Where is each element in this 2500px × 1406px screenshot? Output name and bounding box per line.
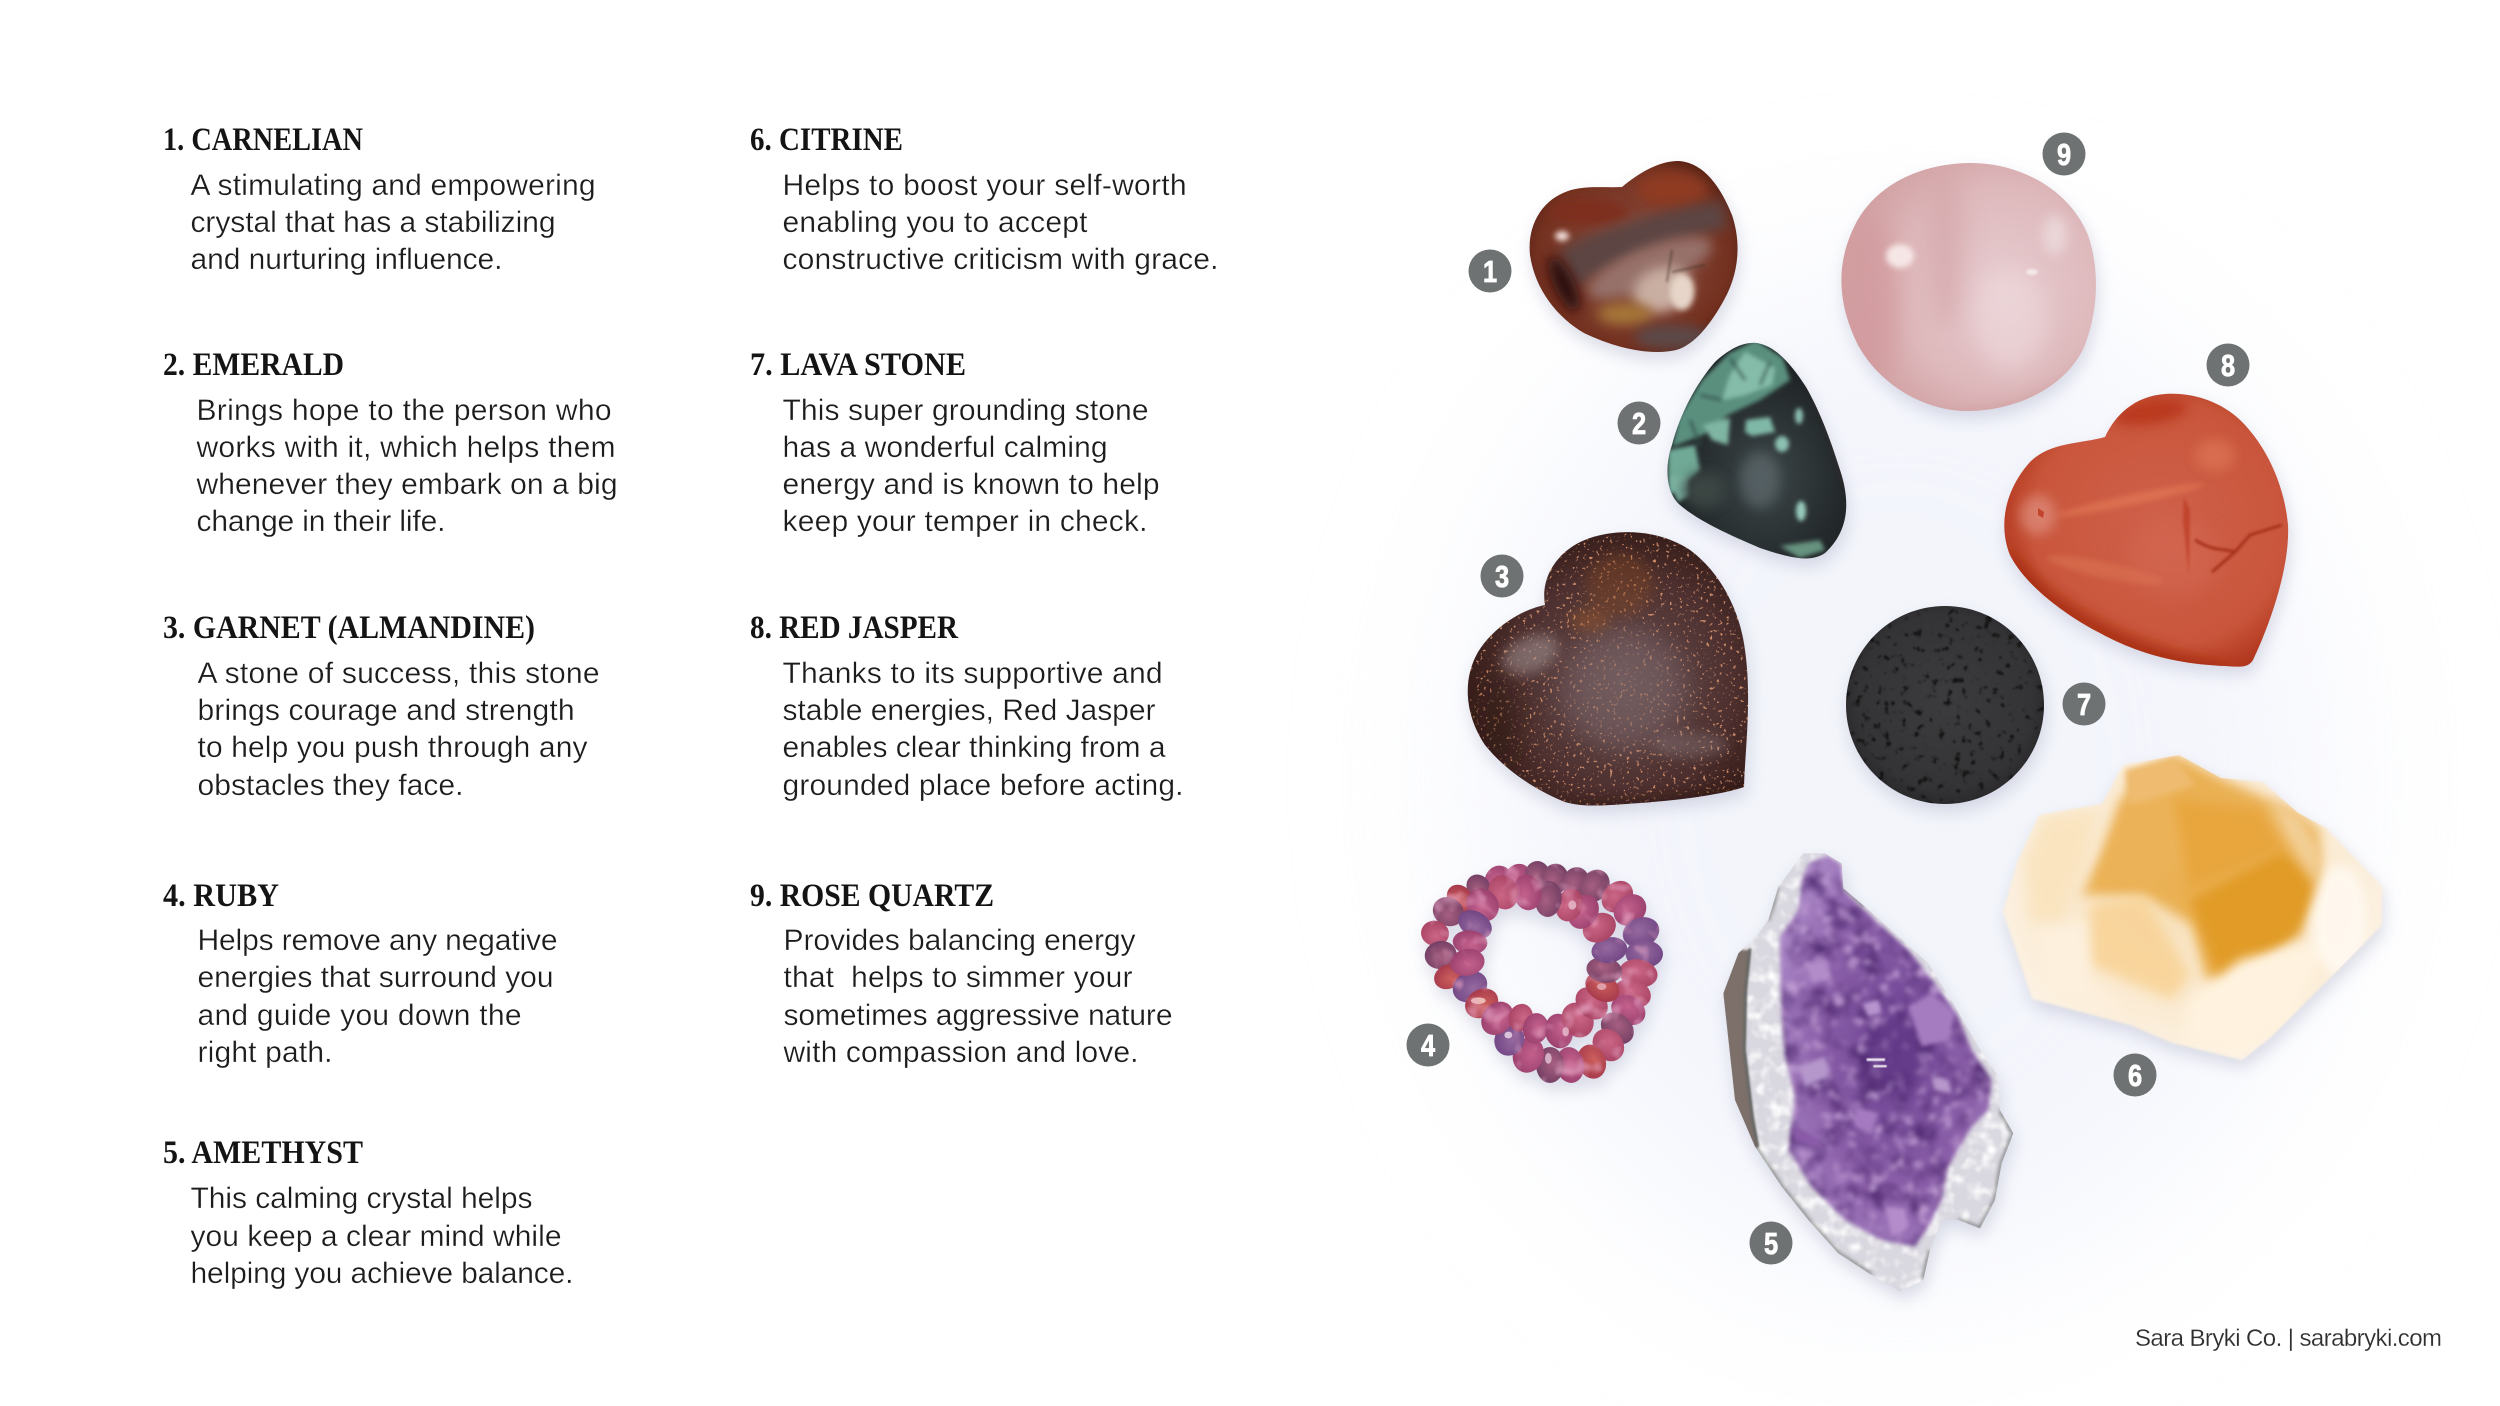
description: brings courage and strength xyxy=(198,694,574,727)
description: obstacles they face. xyxy=(198,769,464,802)
description: constructive criticism with grace. xyxy=(782,243,1218,276)
item 7: Lava Stone xyxy=(750,347,1160,538)
item 1: Carnelian xyxy=(163,122,596,276)
crystal: citrine cluster xyxy=(2003,755,2382,1060)
description: whenever they embark on a big xyxy=(196,468,618,501)
item 4: Ruby xyxy=(163,878,558,1069)
badge 1 xyxy=(1468,250,1512,292)
footer credit: Sara Bryki Co. | sarabryki.com xyxy=(2135,1325,2442,1352)
badge 6 xyxy=(2114,1054,2156,1096)
description: and nurturing influence. xyxy=(190,243,502,276)
description: Thanks to its supportive and xyxy=(782,657,1162,690)
description: energies that surround you xyxy=(198,961,554,994)
description: that helps to simmer your xyxy=(784,961,1132,994)
item 2: Emerald xyxy=(163,347,618,538)
badge 3: 3 xyxy=(1495,560,1509,595)
description: to help you push through any xyxy=(198,731,588,764)
description xyxy=(782,394,1160,538)
badge 5: 5 xyxy=(1764,1227,1778,1262)
description: grounded place before acting. xyxy=(782,769,1184,802)
description xyxy=(190,169,596,276)
heading: 8. RED JASPER xyxy=(750,610,959,646)
crystal: ruby bead bracelet xyxy=(1419,860,1664,1085)
crystal: red jasper heart xyxy=(2000,394,2288,680)
text column 1 xyxy=(163,122,618,1290)
description: A stimulating and empowering xyxy=(190,169,596,202)
description xyxy=(198,657,600,802)
description: Helps to boost your self-worth xyxy=(782,169,1186,202)
badge 1: 1 xyxy=(1483,255,1497,290)
description xyxy=(782,657,1184,802)
description: you keep a clear mind while xyxy=(190,1220,562,1253)
description xyxy=(196,394,618,538)
badge 8: 8 xyxy=(2221,349,2235,384)
heading: 9. ROSE QUARTZ xyxy=(750,878,994,914)
description: enables clear thinking from a xyxy=(782,731,1166,764)
description: crystal that has a stabilizing xyxy=(190,206,556,239)
soft blue studio shading behind crystals xyxy=(1480,280,2320,1280)
badge 9 xyxy=(2042,132,2086,176)
badge 4 xyxy=(1406,1024,1450,1066)
heading: 4. RUBY xyxy=(163,878,279,914)
description: Brings hope to the person who xyxy=(196,394,612,427)
description: right path. xyxy=(198,1036,332,1069)
heading: 2. EMERALD xyxy=(163,347,344,383)
badge 3 xyxy=(1480,554,1524,598)
description: This super grounding stone xyxy=(782,394,1148,427)
badge 8 xyxy=(2206,344,2250,386)
badge 2 xyxy=(1618,402,1660,444)
crystal: emerald tumbled stone xyxy=(1667,340,1860,558)
item 5: Amethyst xyxy=(163,1135,574,1290)
description: helping you achieve balance. xyxy=(190,1257,574,1290)
description: works with it, which helps them xyxy=(196,431,616,464)
badge 2: 2 xyxy=(1632,407,1646,442)
description xyxy=(190,1182,574,1290)
item 6: Citrine xyxy=(750,122,1218,276)
description: A stone of success, this stone xyxy=(198,657,600,690)
heading: 1. CARNELIAN xyxy=(163,122,363,158)
badge 6: 6 xyxy=(2128,1059,2142,1094)
description: keep your temper in check. xyxy=(782,505,1148,538)
crystal: garnet heart xyxy=(1468,532,1748,815)
badge 7 xyxy=(2062,682,2106,726)
crystal: carnelian heart xyxy=(1530,161,1738,352)
description: This calming crystal helps xyxy=(190,1182,532,1215)
badge 4: 4 xyxy=(1421,1029,1435,1064)
description: has a wonderful calming xyxy=(782,431,1108,464)
heading: 3. GARNET (ALMANDINE) xyxy=(163,610,535,646)
description: Helps remove any negative xyxy=(198,924,558,957)
heading: 6. CITRINE xyxy=(750,122,903,158)
description: Provides balancing energy xyxy=(784,924,1136,957)
item 3: Garnet xyxy=(163,610,600,802)
description: change in their life. xyxy=(196,505,446,538)
description: with compassion and love. xyxy=(782,1036,1138,1069)
description xyxy=(198,924,558,1069)
crystal: lava stone sphere xyxy=(1846,606,2044,804)
badge 5 xyxy=(1750,1222,1792,1264)
crystal: rose quartz xyxy=(1840,163,2110,430)
item 8: Red Jasper xyxy=(750,610,1184,802)
description xyxy=(782,924,1172,1069)
description: and guide you down the xyxy=(198,999,522,1032)
description: stable energies, Red Jasper xyxy=(782,694,1156,727)
number badges xyxy=(1406,132,2250,1264)
crystal: amethyst geode slab xyxy=(1722,853,2013,1292)
description: sometimes aggressive nature xyxy=(784,999,1172,1032)
description xyxy=(782,169,1218,276)
heading: 7. LAVA STONE xyxy=(750,347,966,383)
text column 2 xyxy=(750,122,1218,1069)
description: enabling you to accept xyxy=(782,206,1088,239)
item 9: Rose Quartz xyxy=(750,878,1172,1069)
heading: 5. AMETHYST xyxy=(163,1135,363,1171)
badge 7: 7 xyxy=(2077,688,2091,723)
description: energy and is known to help xyxy=(782,468,1160,501)
badge 9: 9 xyxy=(2057,138,2071,173)
